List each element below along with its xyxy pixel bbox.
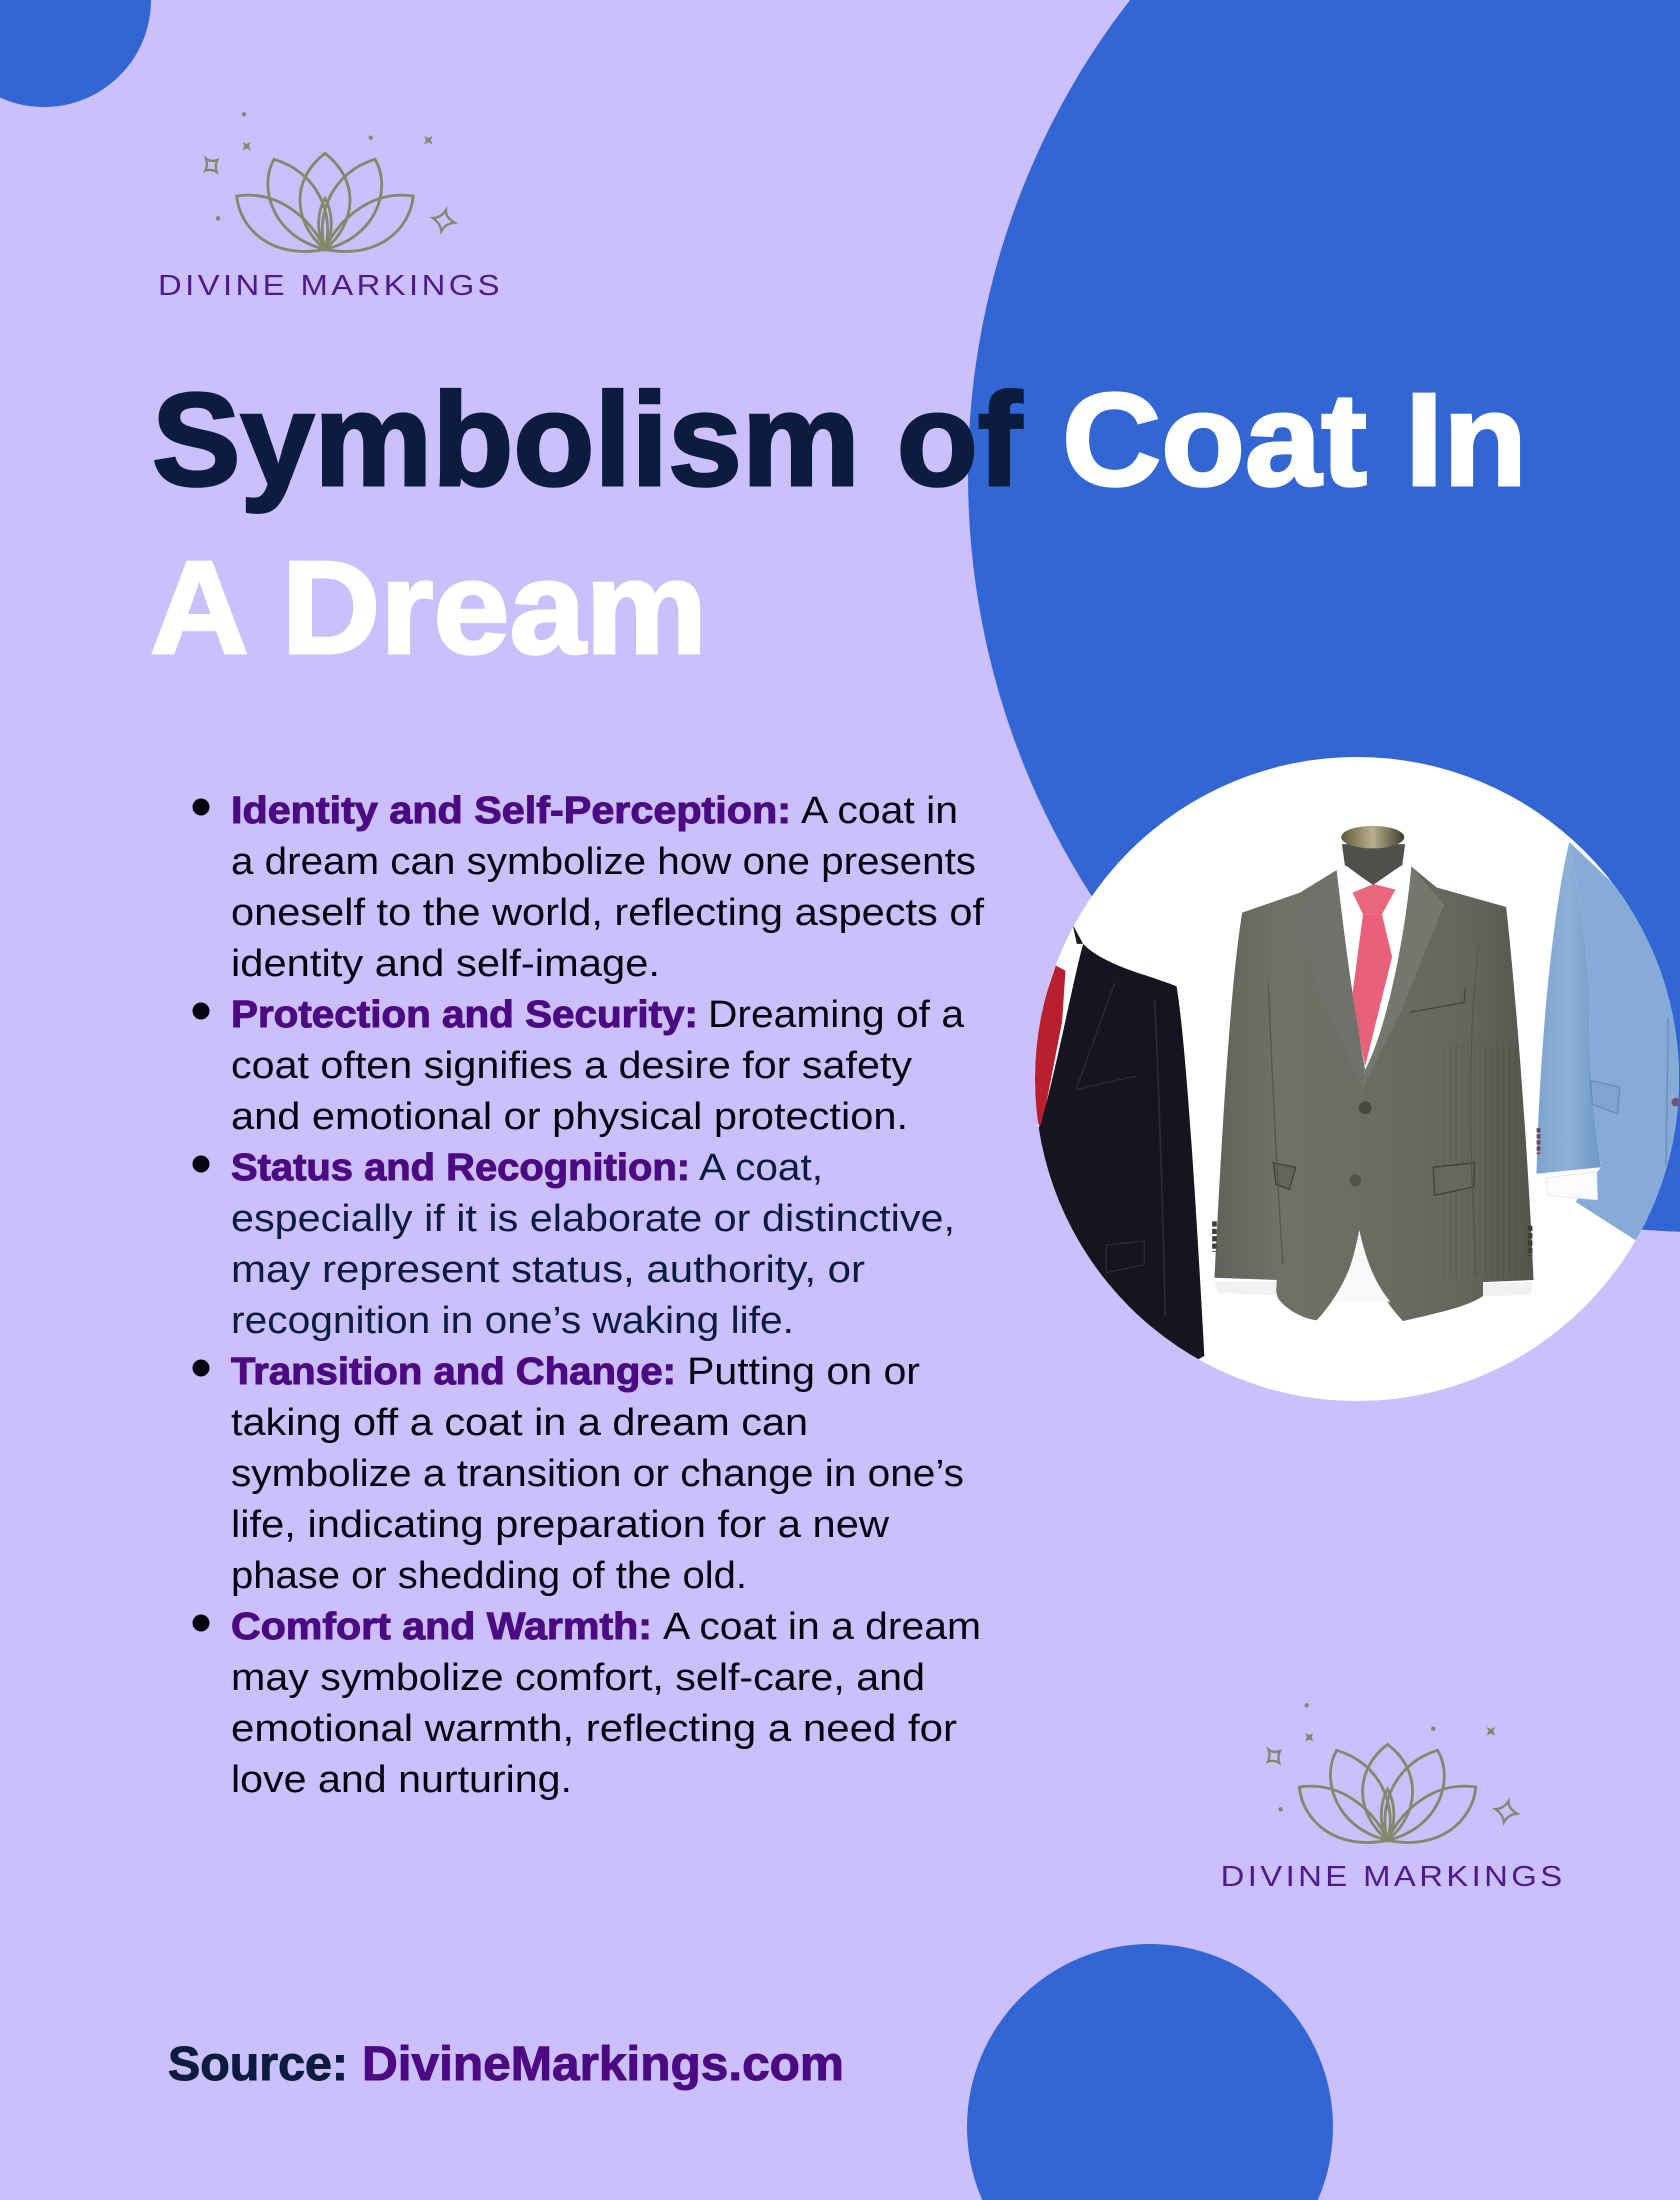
list item: comfort: Comfort and Warmth:: [231, 1606, 652, 1648]
list item: transition: phase or shedding of the old.: [231, 1555, 747, 1597]
list item: comfort: A coat in a dream: [663, 1606, 981, 1648]
bulleted list: [192, 790, 984, 1801]
list item: comfort: love and nurturing.: [231, 1759, 572, 1801]
list item: transition: taking off a coat in a dream can: [231, 1402, 808, 1444]
top logo: [158, 112, 503, 302]
list item: status: [192, 1147, 955, 1342]
icon: lotus: [205, 112, 455, 252]
right blue jacket: [1536, 842, 1680, 1282]
top-left blue circle: [0, 0, 151, 107]
list item: protection: [192, 994, 965, 1138]
list item: identity: a dream can symbolize how one presents: [231, 841, 976, 883]
list item: protection: Dreaming of a: [708, 994, 965, 1036]
bottom right logo: [1221, 1703, 1566, 1893]
list item: status: Status and Recognition:: [231, 1147, 690, 1189]
list item: status: may represent status, authority, or: [231, 1249, 865, 1291]
list item: transition: life, indicating preparation for a new: [231, 1504, 890, 1546]
source line: [168, 2038, 844, 2091]
centre grey jacket on mannequin: [1214, 826, 1533, 1321]
list item: status: recognition in one’s waking life.: [231, 1300, 794, 1342]
source site: DivineMarkings.com: [362, 2038, 844, 2091]
logo wordmark: DIVINE MARKINGS: [158, 270, 503, 302]
source label: Source:: [168, 2038, 348, 2091]
list item: identity: oneself to the world, reflecting aspects of: [231, 892, 984, 934]
bottom blue circle: [967, 1944, 1333, 2200]
list item: identity: A coat in: [801, 790, 958, 832]
title line one dark: Symbolism of: [152, 366, 1023, 513]
list item: transition: symbolize a transition or change in one’s: [231, 1453, 964, 1495]
list item: transition: Transition and Change:: [231, 1351, 676, 1393]
list item: status: A coat,: [699, 1147, 823, 1189]
list item: transition: [192, 1351, 964, 1597]
title line one white: Coat In: [1062, 366, 1527, 513]
photo: three suit jackets in circle: [1020, 750, 1680, 1410]
list item: status: especially if it is elaborate or distinctive,: [231, 1198, 955, 1240]
logo wordmark bottom: DIVINE MARKINGS: [1221, 1861, 1566, 1893]
list item: comfort: emotional warmth, reflecting a need for: [231, 1708, 957, 1750]
list item: identity: identity and self-image.: [231, 943, 660, 985]
large blue ellipse: [968, 0, 1680, 1232]
list item: transition: Putting on or: [687, 1351, 920, 1393]
title line two white: A Dream: [150, 534, 707, 681]
left black jacket: [1020, 924, 1204, 1360]
list item: protection: and emotional or physical protection.: [231, 1096, 908, 1138]
list item: protection: coat often signifies a desire for safety: [231, 1045, 912, 1087]
icon: lotus small: [1268, 1703, 1517, 1843]
list item: protection: Protection and Security:: [231, 994, 698, 1036]
list item: identity: [192, 790, 984, 985]
list item: comfort: may symbolize comfort, self-care, and: [231, 1657, 925, 1699]
title: [150, 366, 1527, 681]
list item: comfort: [192, 1606, 981, 1801]
list item: identity: Identity and Self-Perception:: [231, 790, 791, 832]
